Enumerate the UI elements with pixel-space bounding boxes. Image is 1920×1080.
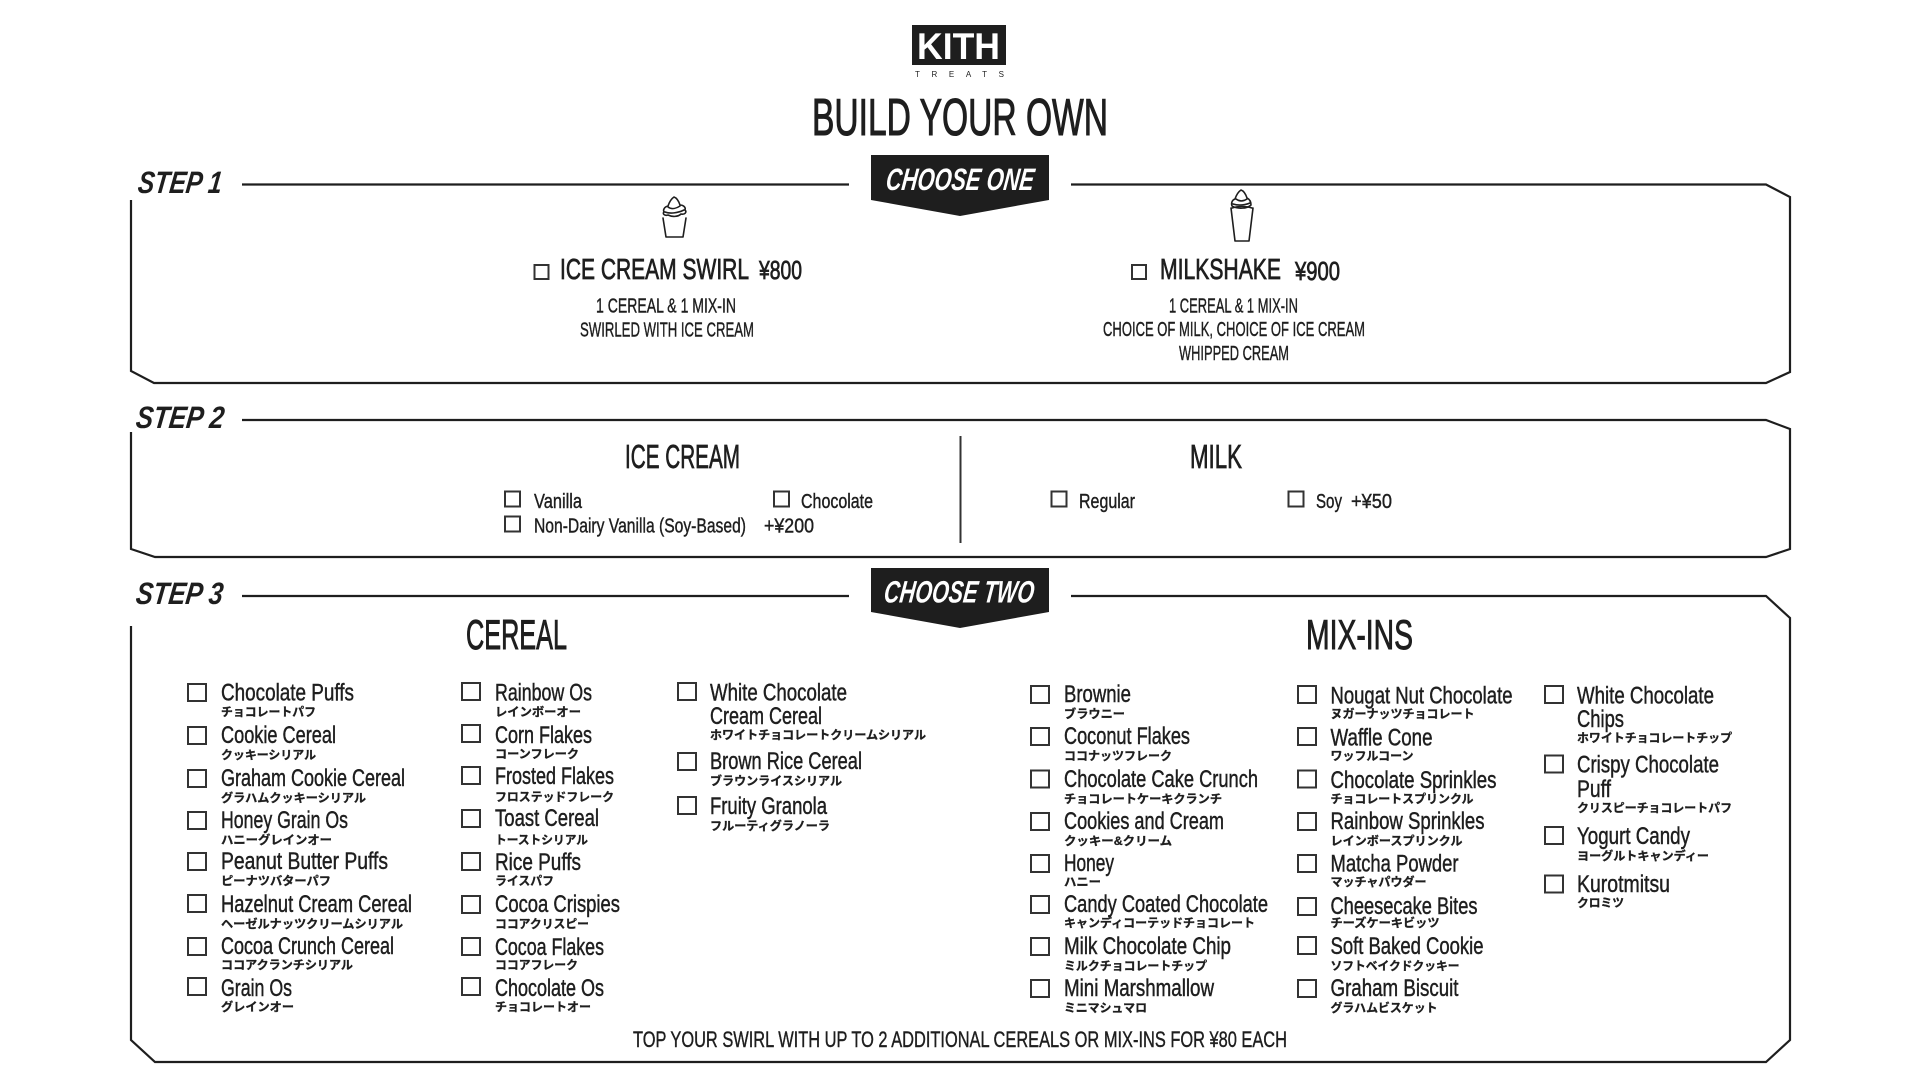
item: graham cookie cereal: グラハムクッキーシリアル bbox=[221, 790, 366, 805]
item: honey bbox=[1031, 850, 1114, 889]
item: chocolate cake crunch: Chocolate Cake Crunch bbox=[1064, 766, 1258, 793]
item: chocolate os: チョコレートオー bbox=[495, 1000, 591, 1014]
item: matcha powder: マッチャパウダー bbox=[1330, 874, 1426, 889]
item: milk chocolate chip bbox=[1031, 933, 1231, 973]
item: cocoa crispies: Cocoa Crispies bbox=[495, 891, 620, 918]
item: soft baked cookie bbox=[1298, 933, 1484, 973]
item: toast cereal bbox=[462, 805, 599, 847]
item: rainbow sprinkles: Rainbow Sprinkles bbox=[1330, 808, 1484, 835]
option: vanilla: Vanilla bbox=[534, 491, 583, 513]
item: chocolate puffs bbox=[188, 680, 354, 719]
heading: milk: MILK bbox=[1190, 438, 1242, 475]
item: toast cereal: Toast Cereal bbox=[495, 805, 599, 832]
item: graham biscuit: Graham Biscuit bbox=[1330, 975, 1459, 1002]
option: milkshake: ¥900 bbox=[1294, 256, 1340, 286]
item: matcha powder bbox=[1298, 850, 1459, 889]
item: matcha powder: Matcha Powder bbox=[1330, 850, 1459, 878]
item: cheesecake bites: Cheesecake Bites bbox=[1330, 893, 1478, 920]
icon: ice cream swirl cup bbox=[663, 197, 686, 237]
step 3 frame bbox=[131, 596, 1790, 1062]
option: milkshake bbox=[1103, 254, 1365, 365]
step 3 label: STEP 3 bbox=[134, 576, 225, 611]
item: mini marshmallow: ミニマシュマロ bbox=[1064, 1001, 1147, 1015]
option: regular milk bbox=[1052, 491, 1135, 513]
option: non-dairy vanilla: +¥200 bbox=[764, 516, 814, 538]
item: white chocolate chips: Chips bbox=[1577, 706, 1624, 733]
column: mix-ins 3 bbox=[1545, 682, 1732, 910]
item: crispy chocolate puff: Crispy Chocolate bbox=[1577, 752, 1719, 778]
item: brownie: Brownie bbox=[1064, 681, 1131, 708]
item: peanut butter puffs bbox=[188, 848, 388, 888]
item: rainbow os bbox=[462, 680, 592, 719]
item: chocolate os bbox=[462, 975, 604, 1014]
option: milkshake: MILKSHAKE bbox=[1160, 254, 1281, 286]
item: cheesecake bites: チーズケーキビッツ bbox=[1330, 915, 1440, 930]
item: candy coated chocolate bbox=[1031, 891, 1268, 930]
banner: choose one: CHOOSE ONE bbox=[884, 162, 1037, 197]
logo: Kith Treats bbox=[912, 25, 1006, 79]
item: rainbow os: Rainbow Os bbox=[495, 680, 592, 706]
item: cocoa flakes: Cocoa Flakes bbox=[495, 934, 604, 961]
footer note: TOP YOUR SWIRL WITH UP TO 2 ADDITIONAL CEREALS OR MIX-INS FOR ¥80 EACH bbox=[633, 1027, 1287, 1052]
item: crispy chocolate puff: クリスピーチョコレートパフ bbox=[1577, 801, 1732, 815]
item: candy coated chocolate: キャンディコーテッドチョコレート bbox=[1064, 915, 1255, 930]
item: graham biscuit: グラハムビスケット bbox=[1330, 1000, 1438, 1015]
item: hazelnut cream cereal: Hazelnut Cream Cereal bbox=[221, 891, 412, 918]
option: soy milk: Soy bbox=[1316, 491, 1342, 513]
item: chocolate cake crunch: チョコレートケーキクランチ bbox=[1064, 792, 1222, 806]
item: coconut flakes bbox=[1031, 723, 1190, 763]
option: non-dairy vanilla: Non-Dairy Vanilla (Soy-Based) bbox=[534, 516, 746, 538]
item: rainbow sprinkles bbox=[1298, 808, 1484, 848]
divider bbox=[960, 436, 962, 543]
panel: step 1 bbox=[131, 155, 1790, 383]
column: mix-ins 2 bbox=[1298, 682, 1512, 1015]
item: frosted flakes bbox=[462, 763, 614, 804]
item: rice puffs: ライスパフ bbox=[495, 874, 554, 888]
option: milkshake: 1 CEREAL & 1 MIX-IN bbox=[1169, 296, 1298, 318]
item: brown rice cereal bbox=[678, 748, 862, 788]
item: graham biscuit bbox=[1298, 975, 1459, 1015]
item: cookies and cream: クッキー&クリーム bbox=[1064, 834, 1172, 848]
item: peanut butter puffs: Peanut Butter Puffs bbox=[221, 848, 388, 875]
item: hazelnut cream cereal bbox=[188, 891, 412, 931]
item: cocoa crunch cereal: ココアクランチシリアル bbox=[221, 958, 353, 972]
panel: step 3 bbox=[131, 568, 1790, 1062]
item: white chocolate chips bbox=[1545, 682, 1732, 745]
option: chocolate: Chocolate bbox=[801, 491, 873, 513]
heading: cereal: CEREAL bbox=[466, 611, 567, 658]
option: milkshake: WHIPPED CREAM bbox=[1179, 343, 1289, 365]
item: cookies and cream: Cookies and Cream bbox=[1064, 808, 1224, 835]
option: ice cream swirl: ¥800 bbox=[758, 255, 802, 285]
item: chocolate puffs: Chocolate Puffs bbox=[221, 680, 354, 706]
option: chocolate bbox=[774, 491, 873, 513]
item: kurotmitsu: Kurotmitsu bbox=[1577, 871, 1670, 898]
item: corn flakes bbox=[462, 722, 592, 761]
item: white chocolate cream cereal bbox=[678, 680, 926, 742]
option: ice cream swirl: SWIRLED WITH ICE CREAM bbox=[580, 320, 754, 342]
option: ice cream swirl: ICE CREAM SWIRL bbox=[560, 254, 749, 286]
item: chocolate sprinkles bbox=[1298, 767, 1496, 806]
item: mini marshmallow: Mini Marshmallow bbox=[1064, 975, 1215, 1002]
item: chocolate puffs: チョコレートパフ bbox=[221, 705, 316, 719]
item: mini marshmallow bbox=[1031, 975, 1215, 1015]
item: brownie: ブラウニー bbox=[1064, 706, 1125, 721]
item: fruity granola: フルーティグラノーラ bbox=[710, 818, 830, 833]
column: mix-ins 1 bbox=[1031, 681, 1268, 1015]
option: ice cream swirl bbox=[534, 254, 802, 342]
option: vanilla bbox=[505, 491, 583, 513]
item: rice puffs bbox=[462, 849, 581, 888]
item: waffle cone: Waffle Cone bbox=[1330, 724, 1432, 752]
column: cereal 2 bbox=[462, 680, 620, 1014]
item: hazelnut cream cereal: ヘーゼルナッツクリームシリアル bbox=[221, 916, 403, 931]
item: toast cereal: トーストシリアル bbox=[495, 833, 588, 847]
item: rainbow sprinkles: レインボースプリンクル bbox=[1330, 834, 1462, 848]
item: cocoa flakes: ココアフレーク bbox=[495, 958, 578, 972]
item: nougat nut chocolate: Nougat Nut Chocolate bbox=[1330, 682, 1512, 710]
item: yogurt candy bbox=[1545, 823, 1709, 863]
panel: step 2 bbox=[131, 400, 1790, 557]
item: rice puffs: Rice Puffs bbox=[495, 849, 581, 876]
item: cookie cereal: クッキーシリアル bbox=[221, 748, 316, 762]
item: crispy chocolate puff: Puff bbox=[1577, 776, 1611, 803]
item: yogurt candy: ヨーグルトキャンディー bbox=[1577, 848, 1709, 863]
item: corn flakes: Corn Flakes bbox=[495, 722, 592, 749]
item: peanut butter puffs: ピーナツバターパフ bbox=[221, 874, 331, 888]
item: nougat nut chocolate: ヌガーナッツチョコレート bbox=[1330, 706, 1474, 721]
banner: choose one bbox=[871, 155, 1049, 216]
item: coconut flakes: ココナッツフレーク bbox=[1064, 749, 1172, 763]
heading: mix-ins: MIX-INS bbox=[1306, 611, 1413, 658]
column: cereal 1 bbox=[188, 680, 412, 1014]
item: soft baked cookie: ソフトベイクドクッキー bbox=[1330, 959, 1460, 973]
item: kurotmitsu: クロミツ bbox=[1577, 896, 1624, 910]
item: milk chocolate chip: ミルクチョコレートチップ bbox=[1064, 959, 1207, 973]
item: milk chocolate chip: Milk Chocolate Chip bbox=[1064, 933, 1231, 960]
item: fruity granola: Fruity Granola bbox=[710, 793, 827, 820]
item: coconut flakes: Coconut Flakes bbox=[1064, 723, 1190, 750]
item: chocolate sprinkles: Chocolate Sprinkles bbox=[1330, 767, 1496, 794]
item: grain os bbox=[188, 975, 294, 1014]
banner: choose two bbox=[871, 568, 1049, 628]
item: frosted flakes: Frosted Flakes bbox=[495, 763, 614, 790]
item: honey: Honey bbox=[1064, 850, 1114, 877]
option: soy milk bbox=[1288, 491, 1392, 513]
item: nougat nut chocolate bbox=[1298, 682, 1512, 721]
item: honey grain os: ハニーグレインオー bbox=[221, 832, 332, 847]
item: white chocolate chips: White Chocolate bbox=[1577, 682, 1714, 710]
item: grain os: Grain Os bbox=[221, 975, 292, 1002]
item: graham cookie cereal: Graham Cookie Cereal bbox=[221, 765, 405, 792]
item: grain os: グレインオー bbox=[221, 999, 294, 1014]
title: BUILD YOUR OWN bbox=[812, 89, 1108, 147]
step 1 label: STEP 1 bbox=[136, 165, 224, 200]
step 2 label: STEP 2 bbox=[134, 400, 226, 435]
item: white chocolate cream cereal: ホワイトチョコレートクリームシリアル bbox=[710, 728, 926, 742]
item: brown rice cereal: Brown Rice Cereal bbox=[710, 748, 862, 775]
item: white chocolate cream cereal: White Chocolate bbox=[710, 680, 847, 706]
item: cookie cereal bbox=[188, 722, 336, 762]
item: graham cookie cereal bbox=[188, 765, 405, 805]
item: corn flakes: コーンフレーク bbox=[495, 747, 579, 761]
item: cocoa flakes bbox=[462, 934, 604, 972]
item: waffle cone bbox=[1298, 724, 1432, 763]
option: regular milk: Regular bbox=[1079, 491, 1135, 513]
item: soft baked cookie: Soft Baked Cookie bbox=[1330, 933, 1484, 960]
item: frosted flakes: フロステッドフレーク bbox=[495, 790, 614, 804]
banner: choose two: CHOOSE TWO bbox=[882, 575, 1036, 609]
item: kurotmitsu bbox=[1545, 871, 1670, 910]
item: chocolate cake crunch bbox=[1031, 766, 1258, 806]
item: cocoa crunch cereal bbox=[188, 933, 394, 972]
item: chocolate sprinkles: チョコレートスプリンクル bbox=[1330, 792, 1474, 806]
logo: Kith Treats: TREATS bbox=[915, 70, 1004, 79]
item: yogurt candy: Yogurt Candy bbox=[1577, 823, 1690, 850]
item: cookie cereal: Cookie Cereal bbox=[221, 722, 336, 749]
item: honey grain os bbox=[188, 807, 348, 847]
step 1 frame bbox=[131, 184, 1790, 383]
item: crispy chocolate puff bbox=[1545, 752, 1732, 815]
item: brown rice cereal: ブラウンライスシリアル bbox=[710, 773, 842, 788]
item: honey: ハニー bbox=[1064, 875, 1101, 889]
item: cookies and cream bbox=[1031, 808, 1224, 848]
item: fruity granola bbox=[678, 793, 830, 833]
item: cocoa crispies: ココアクリスピー bbox=[495, 917, 589, 931]
item: brownie bbox=[1031, 681, 1131, 721]
item: honey grain os: Honey Grain Os bbox=[221, 807, 348, 834]
item: candy coated chocolate: Candy Coated Chocolate bbox=[1064, 891, 1268, 918]
item: chocolate os: Chocolate Os bbox=[495, 975, 604, 1002]
item: white chocolate chips: ホワイトチョコレートチップ bbox=[1577, 731, 1732, 745]
icon: milkshake cup bbox=[1231, 190, 1253, 241]
item: cocoa crispies bbox=[462, 891, 620, 931]
item: rainbow os: レインボーオー bbox=[495, 705, 581, 719]
option: ice cream swirl: 1 CEREAL & 1 MIX-IN bbox=[596, 296, 736, 318]
option: milkshake: CHOICE OF MILK, CHOICE OF ICE CREAM bbox=[1103, 319, 1365, 341]
option: soy milk: +¥50 bbox=[1351, 491, 1392, 513]
item: white chocolate cream cereal: Cream Cereal bbox=[710, 703, 822, 730]
logo: Kith Treats: KITH bbox=[917, 26, 1000, 67]
column: cereal 3 bbox=[678, 680, 926, 833]
heading: ice cream: ICE CREAM bbox=[625, 438, 740, 475]
item: waffle cone: ワッフルコーン bbox=[1330, 749, 1414, 763]
step 2 frame bbox=[131, 420, 1790, 557]
item: cocoa crunch cereal: Cocoa Crunch Cereal bbox=[221, 933, 394, 960]
item: cheesecake bites bbox=[1298, 893, 1478, 930]
